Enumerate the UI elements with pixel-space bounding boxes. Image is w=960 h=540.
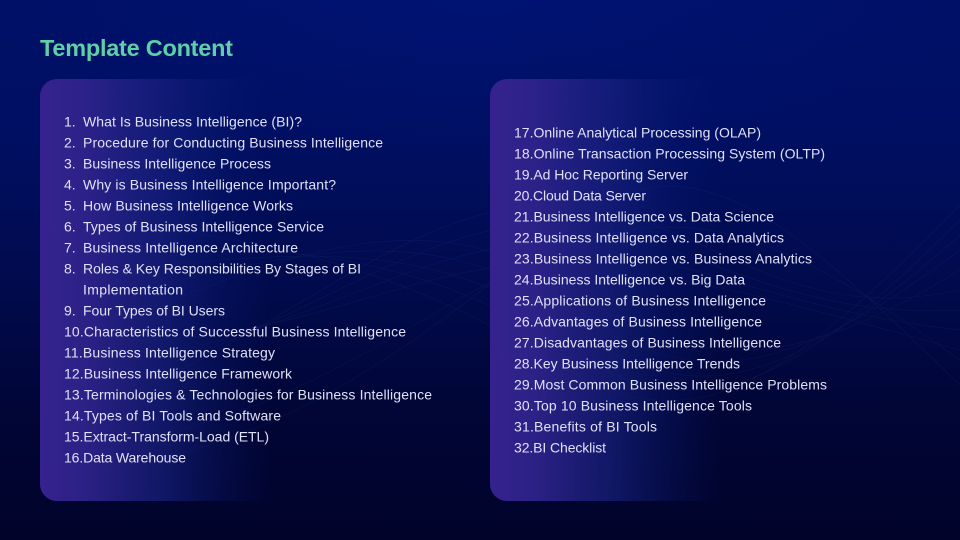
list items 17 to 32: 24.Business Intelligence vs. Big Data	[514, 272, 745, 288]
list items 1 to 16: 6.	[64, 219, 76, 235]
list items 1 to 16: 4.	[64, 177, 76, 193]
list items 17 to 32: 30.Top 10 Business Intelligence Tools	[514, 398, 752, 414]
list items 1 to 16: Why is Business Intelligence Important?	[83, 177, 336, 193]
list items 1 to 16: 14.Types of BI Tools and Software	[64, 408, 281, 424]
panel background left	[40, 79, 272, 501]
list items 1 to 16: 2.	[64, 135, 76, 151]
list items 17 to 32: 29.Most Common Business Intelligence Problems	[514, 377, 827, 393]
list items 17 to 32: 25.Applications of Business Intelligence	[514, 293, 766, 309]
list items 1 to 16	[64, 114, 432, 466]
list items 1 to 16: 11.Business Intelligence Strategy	[64, 345, 275, 361]
list items 1 to 16: Four Types of BI Users	[83, 303, 225, 319]
list items 1 to 16: Business Intelligence Architecture	[83, 240, 298, 256]
list items 17 to 32: 20.Cloud Data Server	[514, 188, 646, 204]
list items 1 to 16: 9.	[64, 303, 76, 319]
list items 17 to 32: 32.BI Checklist	[514, 440, 606, 456]
list items 1 to 16: 8.	[64, 261, 76, 277]
decorative wave lines	[120, 186, 960, 465]
list items 1 to 16: 1.	[64, 114, 76, 130]
list items 17 to 32: 22.Business Intelligence vs. Data Analytics	[514, 230, 784, 246]
list items 1 to 16: 16.Data Warehouse	[64, 450, 186, 466]
list items 1 to 16: 10.Characteristics of Successful Business Intelligence	[64, 324, 406, 340]
list items 17 to 32: 21.Business Intelligence vs. Data Science	[514, 209, 774, 225]
list items 1 to 16: Implementation	[83, 282, 183, 298]
panel: right contents list	[490, 79, 827, 501]
list items 1 to 16: 13.Terminologies & Technologies for Business Intelligence	[64, 387, 432, 403]
list items 17 to 32: 23.Business Intelligence vs. Business Analytics	[514, 251, 812, 267]
list items 1 to 16: Roles & Key Responsibilities By Stages of BI	[83, 261, 361, 277]
list items 1 to 16: Types of Business Intelligence Service	[83, 219, 324, 235]
list items 17 to 32: 19.Ad Hoc Reporting Server	[514, 167, 688, 183]
list items 1 to 16: 15.Extract-Transform-Load (ETL)	[64, 429, 269, 445]
list items 1 to 16: What Is Business Intelligence (BI)?	[83, 114, 302, 130]
list items 1 to 16: 3.	[64, 156, 76, 172]
list items 17 to 32: 31.Benefits of BI Tools	[514, 419, 657, 435]
list items 17 to 32: 28.Key Business Intelligence Trends	[514, 356, 740, 372]
panel background right	[490, 79, 722, 501]
list items 1 to 16: 7.	[64, 240, 76, 256]
panel: left contents list	[40, 79, 432, 501]
list items 1 to 16: 12.Business Intelligence Framework	[64, 366, 293, 382]
title: Template Content	[40, 35, 233, 61]
list items 1 to 16: Procedure for Conducting Business Intelligence	[83, 135, 383, 151]
list items 17 to 32: 18.Online Transaction Processing System (OLTP)	[514, 146, 825, 162]
list items 17 to 32: 27.Disadvantages of Business Intelligence	[514, 335, 781, 351]
list items 1 to 16: Business Intelligence Process	[83, 156, 271, 172]
list items 17 to 32: 17.Online Analytical Processing (OLAP)	[514, 125, 761, 141]
list items 1 to 16: 5.	[64, 198, 76, 214]
list items 17 to 32: 26.Advantages of Business Intelligence	[514, 314, 762, 330]
list items 1 to 16: How Business Intelligence Works	[83, 198, 293, 214]
list items 17 to 32	[514, 125, 827, 456]
